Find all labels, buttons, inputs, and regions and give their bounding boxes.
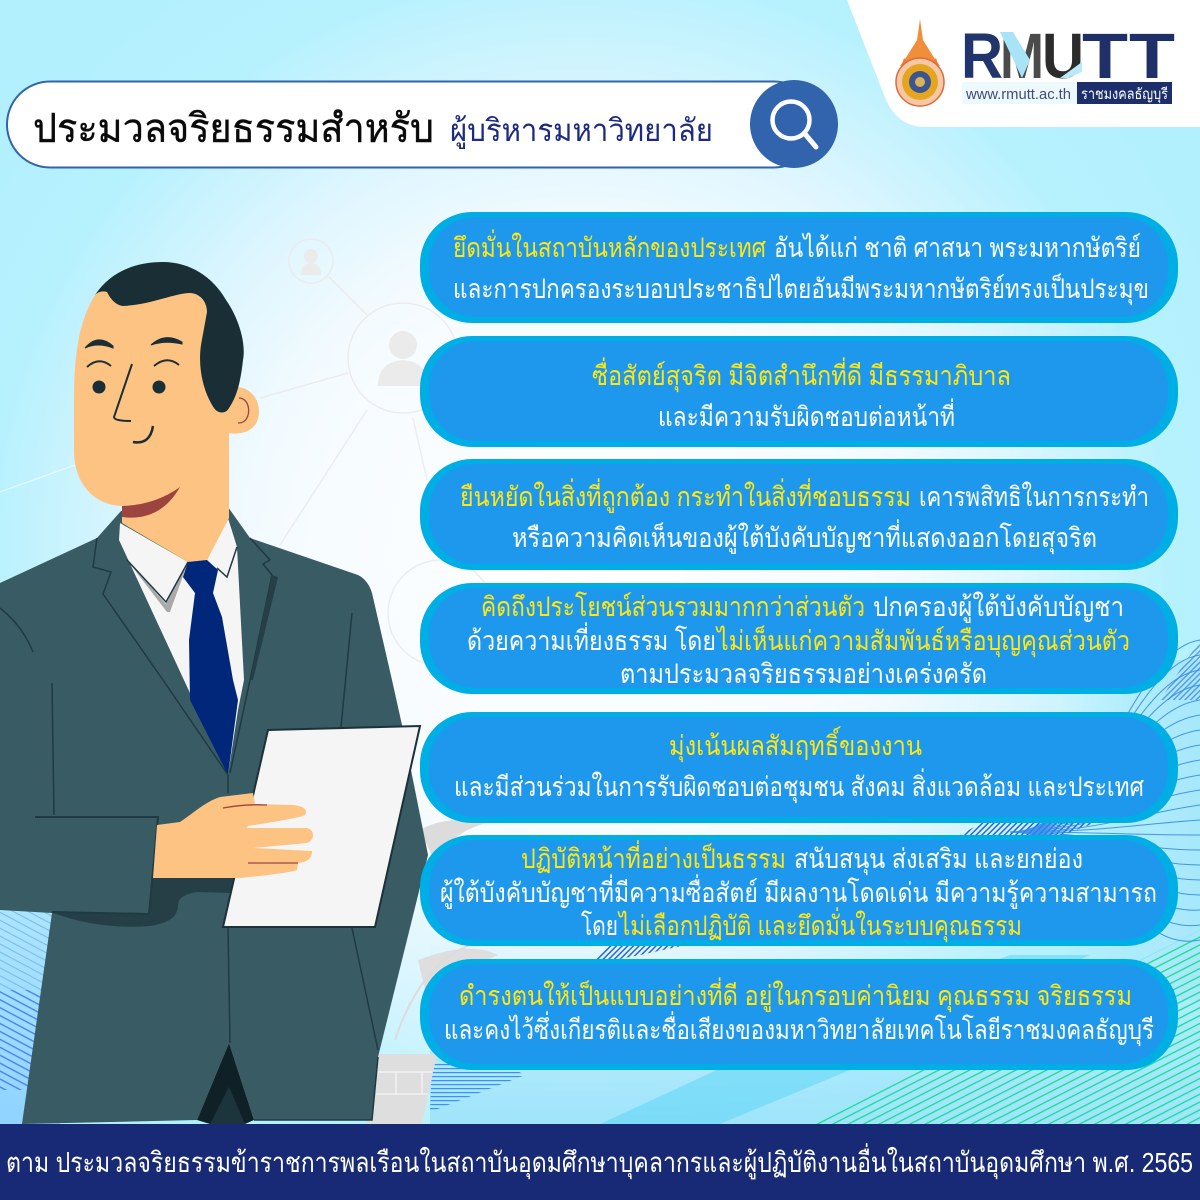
panel: principle 2: ซื่อสัตย์สุจริต มีจิตสำนึกที่ดี มีธรรมาภิบาล <box>592 357 1011 393</box>
logo wordmark: M <box>1000 20 1044 92</box>
coat vent <box>197 1043 254 1124</box>
logo url and campus name: ราชมงคลธัญบุรี <box>1081 86 1168 104</box>
logo wordmark: R <box>961 20 1003 92</box>
panel: principle 6: โดย <box>581 911 618 941</box>
logo url and campus name <box>962 82 1172 104</box>
panel: principle 4: ปกครองผู้ใต้บังคับบัญชา <box>873 591 1124 623</box>
logo wordmark: T <box>1082 20 1128 92</box>
hand <box>153 793 313 878</box>
panel: principle 5: มุ่งเน้นผลสัมฤทธิ์ของงาน <box>669 726 922 763</box>
collar shadow <box>127 560 188 612</box>
panel: principle 1: ยึดมั่นในสถาบันหลักของประเทศ <box>453 229 766 263</box>
panel: principle 3 <box>420 459 1178 570</box>
logo url and campus name: www.rmutt.ac.th <box>965 87 1071 103</box>
panel: principle 6 <box>420 835 1178 946</box>
ear <box>228 387 259 434</box>
search bar title <box>7 80 838 168</box>
sleeve shadow <box>53 878 233 927</box>
tie <box>183 560 238 775</box>
logo panel <box>847 0 1200 127</box>
logo wordmark <box>961 20 1175 92</box>
sleeve cuff <box>35 817 158 914</box>
icon: magnifying glass <box>750 80 838 168</box>
person illustration <box>0 262 428 1124</box>
panel: principle 5 <box>420 712 1178 823</box>
panel: principle 1 <box>420 212 1178 323</box>
panel: principle 3: หรือความคิดเห็นของผู้ใต้บังคับบัญชาที่แสดงออกโดยสุจริต <box>512 519 1097 555</box>
jacket <box>0 507 428 1124</box>
panel: principle 6: ปฏิบัติหน้าที่อย่างเป็นธรรม <box>521 840 786 874</box>
panel: principle 4: ตามประมวลจริยธรรมอย่างเคร่งครัด <box>620 659 987 689</box>
neck and face <box>74 278 229 562</box>
plant and pedestal illustration <box>366 820 498 1124</box>
panel: principle 7 <box>420 959 1178 1070</box>
face features <box>85 338 182 442</box>
panel: principle 6: ไม่เลือกปฏิบัติ และยึดมั่นในระบบคุณธรรม <box>617 907 1022 943</box>
panel: principle 4: ไม่เห็นแก่ความสัมพันธ์หรือบุญคุณส่วนตัว <box>715 623 1130 658</box>
panel: principle 1: อันได้แก่ ชาติ ศาสนา พระมหากษัตริย์ <box>774 232 1141 263</box>
title: main heading: ประมวลจริยธรรมสำหรับ <box>33 107 434 151</box>
title: audience: ผู้บริหารมหาวิทยาลัย <box>450 113 713 149</box>
panel: principle 4: ด้วยความเที่ยงธรรม โดย <box>467 622 716 656</box>
icon: university seal <box>896 19 944 106</box>
logo wordmark: U <box>1042 20 1084 92</box>
panel: principle 6: สนับสนุน ส่งเสริม และยกย่อง <box>794 844 1083 876</box>
panel: principle 3: ยืนหยัดในสิ่งที่ถูกต้อง กระทำในสิ่งที่ชอบธรรม <box>460 478 911 513</box>
shirt <box>119 518 244 775</box>
network diagram watermark <box>0 239 494 666</box>
footer source bar <box>0 1124 1200 1200</box>
logo wordmark: T <box>1129 20 1175 92</box>
panel: principle 2 <box>420 336 1178 447</box>
panel: principle 4 <box>420 583 1178 694</box>
jacket seams and lapels <box>0 538 378 1120</box>
hair <box>95 262 244 412</box>
paper <box>223 726 420 927</box>
panel: principle 3: เคารพสิทธิในการกระทำ <box>919 481 1149 512</box>
chin shadow <box>122 487 180 518</box>
panel: principle 2: และมีความรับผิดชอบต่อหน้าที่ <box>658 398 955 432</box>
panel: principle 4: คิดถึงประโยชน์ส่วนรวมมากกว่าส่วนตัว <box>481 591 865 622</box>
